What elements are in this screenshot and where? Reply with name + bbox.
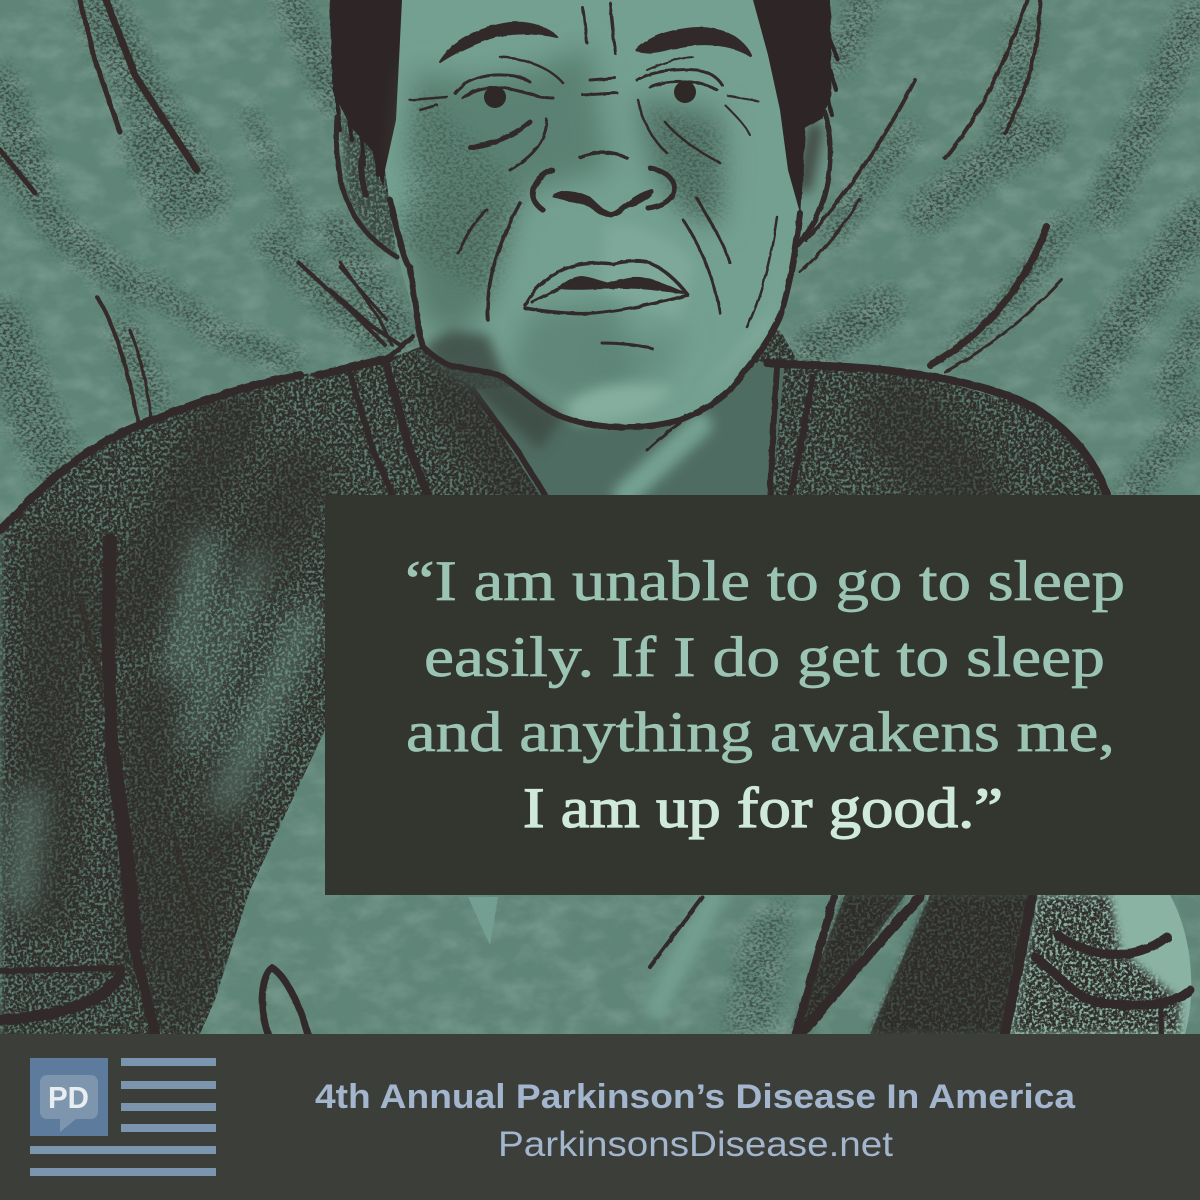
- quote text: “I am unable to go to sleep: [405, 550, 1125, 613]
- quote text: easily. If I do get to sleep: [424, 626, 1105, 689]
- icon: PD logo: [30, 1058, 216, 1176]
- head outline: [336, 117, 397, 257]
- footer url: ParkinsonsDisease.net: [498, 1125, 893, 1164]
- charcoal streaks: [0, 0, 1200, 493]
- neck area: [473, 360, 785, 495]
- illustration: face: [330, 0, 830, 450]
- illustration: shirt: [0, 330, 1194, 1034]
- panel: footer bar: [0, 1034, 1200, 1200]
- quote text: I am up for good.”: [523, 777, 1003, 840]
- shirt and sleeve outlines: [0, 358, 1190, 1034]
- sleeve at lower right: [725, 895, 1191, 1034]
- illustration: ears and hair: [330, 0, 838, 258]
- footer title: 4th Annual Parkinson’s Disease In America: [315, 1078, 1076, 1116]
- panel: quote box: [325, 495, 1200, 895]
- fold lines: [0, 0, 1062, 430]
- quote text: and anything awakens me,: [406, 701, 1115, 764]
- hair strands: [330, 0, 838, 220]
- right ear: [790, 112, 830, 245]
- lower bedding highlight: [656, 897, 714, 1007]
- face shading: [400, 45, 725, 410]
- face line work: [330, 3, 830, 450]
- quote text: [405, 550, 1125, 840]
- lower wedge highlight: [468, 897, 498, 945]
- eyes: [484, 81, 696, 108]
- left ear: [340, 117, 400, 258]
- icon: PD logo: PD: [48, 1080, 89, 1115]
- dark folds at lower right: [792, 895, 1030, 1034]
